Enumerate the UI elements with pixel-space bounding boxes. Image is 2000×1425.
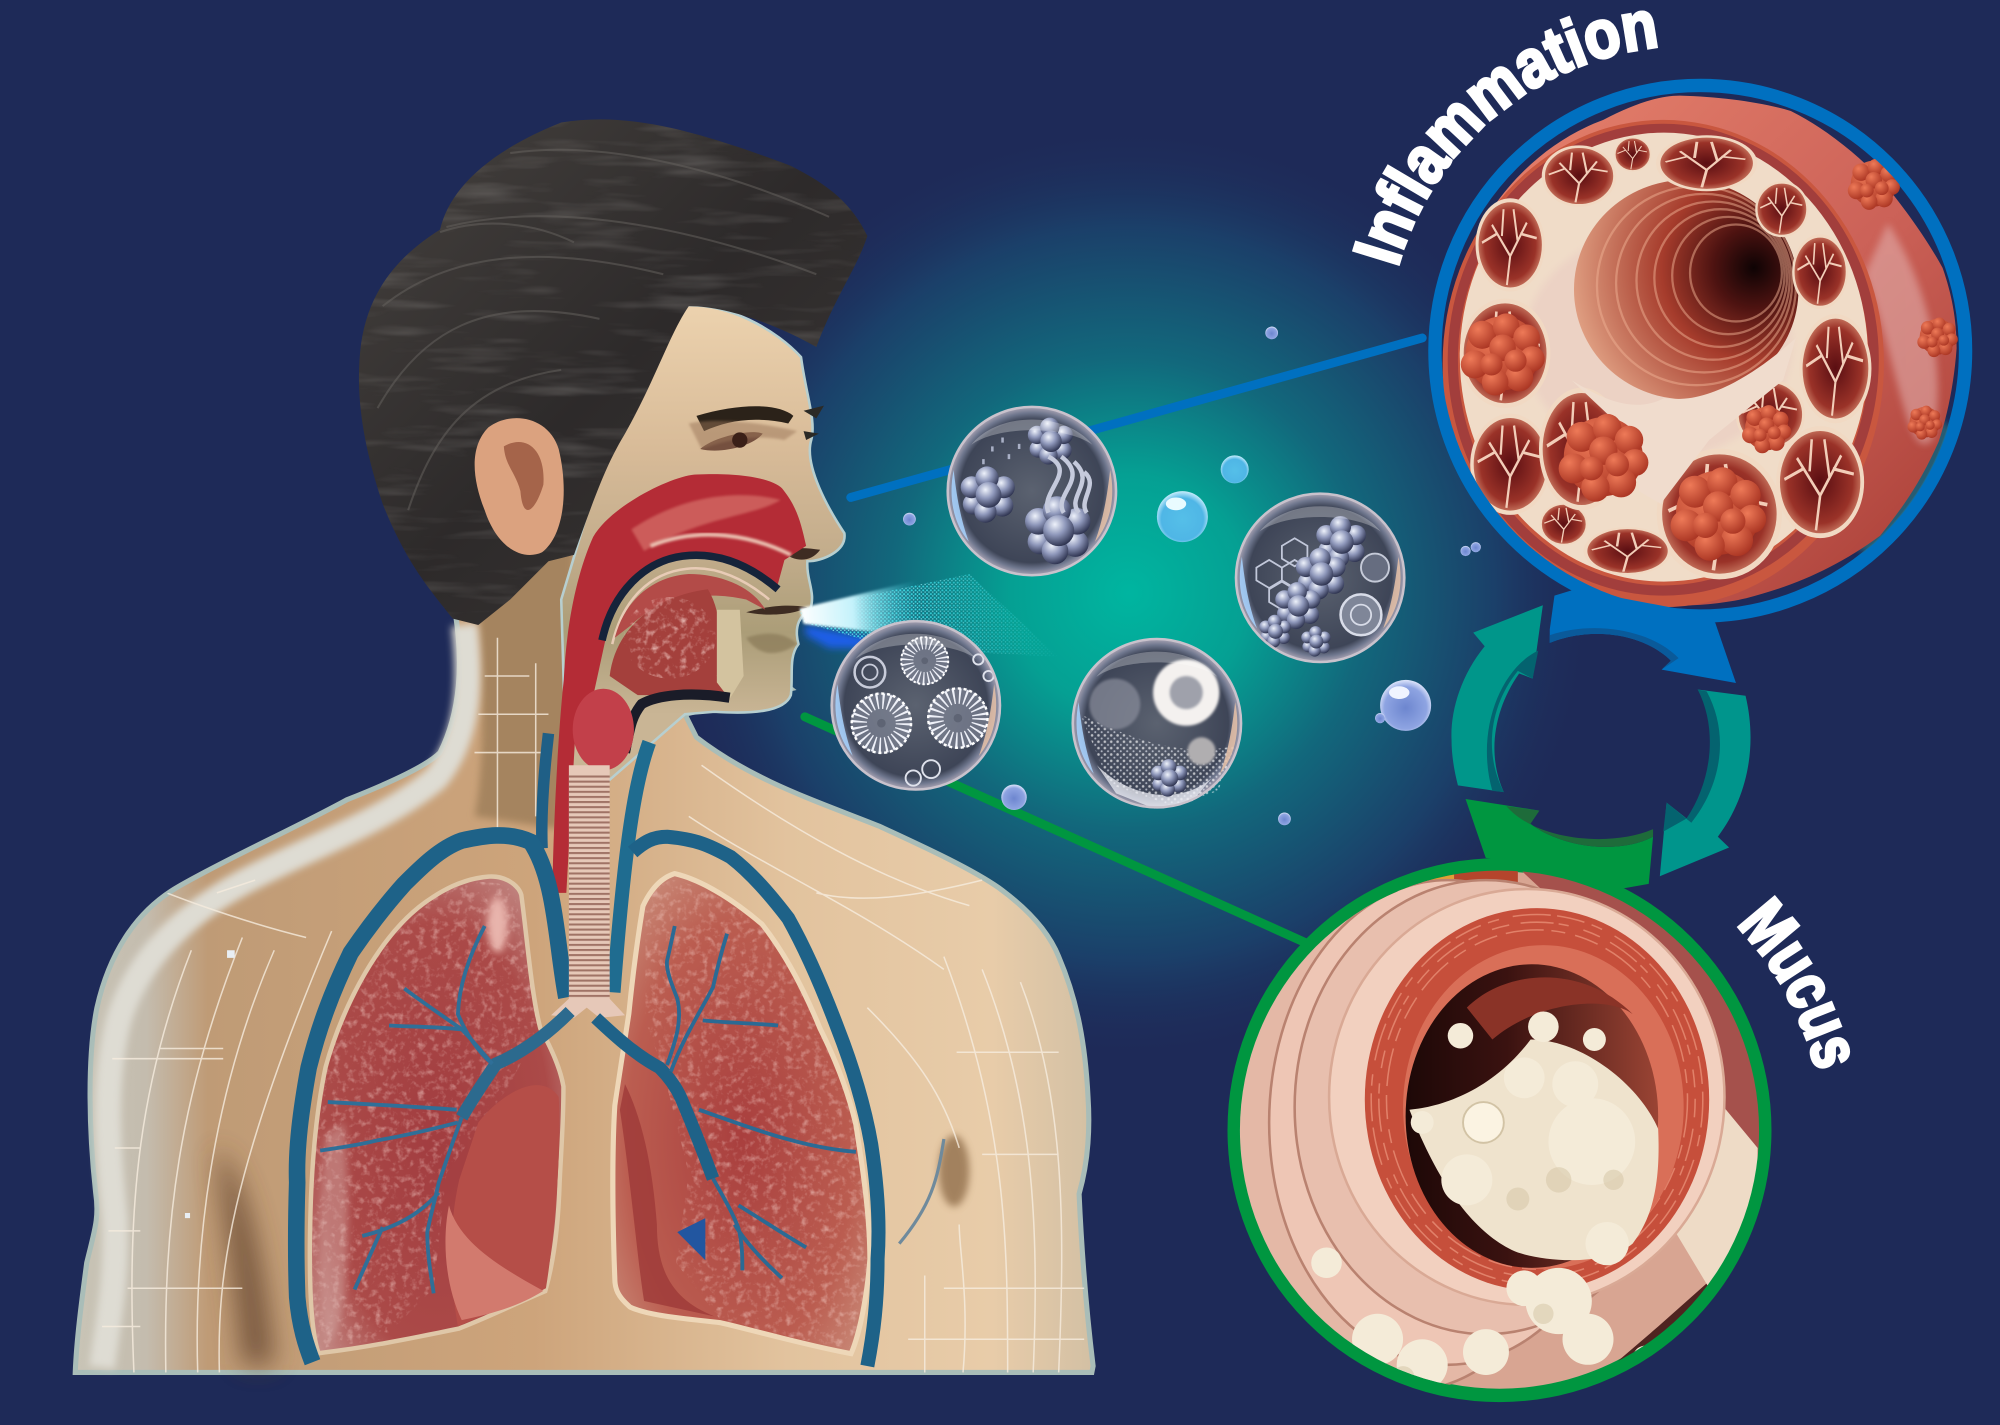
person anatomy figure	[75, 115, 1093, 1372]
right lung texture	[645, 880, 867, 1348]
nose and mouth detail	[746, 548, 820, 615]
lower lip shading	[746, 634, 797, 653]
inner pink wall	[1403, 945, 1684, 1269]
outer tube layers	[1240, 892, 1476, 1385]
lower left dark tissue	[1224, 1224, 1327, 1403]
left blue vessel	[542, 733, 548, 848]
air sacs	[1543, 147, 1615, 205]
bubbles	[903, 327, 1481, 825]
mucus airway panel	[1224, 865, 1773, 1403]
ring	[1234, 865, 1765, 1395]
small mucus bead	[1463, 1102, 1504, 1143]
cycle arrow: top blue	[1550, 589, 1736, 683]
lumen ribs	[1597, 186, 1796, 385]
palate pink	[615, 574, 765, 638]
bronchial tree right	[596, 1018, 713, 1179]
left pleura arch	[296, 835, 566, 1362]
left armpit shadow	[217, 1148, 274, 1365]
airway pale outline	[612, 568, 769, 644]
lumen	[1574, 180, 1798, 399]
left lung highlight	[487, 897, 508, 953]
lumen shading	[1467, 977, 1633, 1040]
hair texture	[359, 122, 851, 604]
red fibrous wall	[1365, 908, 1709, 1291]
bronchial tree left	[462, 1011, 570, 1117]
cream ring tissue	[1460, 133, 1868, 582]
mucosa bridge	[1571, 338, 1796, 504]
mucus shading	[1392, 1167, 1624, 1389]
connector line: blue to inflammation	[851, 338, 1422, 497]
hair strands	[378, 150, 829, 510]
tube body highlight	[1865, 223, 1938, 444]
red nasal cavity and pharynx	[552, 474, 806, 893]
body grid lines	[102, 638, 1084, 1372]
cut face outer	[1443, 120, 1884, 607]
torso and neck	[75, 510, 1093, 1372]
petri dish 4	[1073, 639, 1241, 809]
right lung dark pocket	[620, 1084, 714, 1316]
right armpit shadow	[939, 1135, 969, 1207]
mucus lumps	[1311, 1011, 1658, 1390]
face	[561, 305, 845, 816]
shadow behind tube	[1858, 419, 1950, 554]
left lower lobe	[451, 1085, 559, 1327]
mucosa shading	[1534, 256, 1789, 449]
connector line: green to mucus	[805, 717, 1314, 946]
right blue vessel	[614, 742, 649, 992]
petri dish 3	[832, 621, 1000, 790]
nasal tissue highlight	[631, 495, 781, 551]
tongue	[610, 589, 730, 695]
inflammation airway panel	[1435, 85, 1977, 616]
left lobe pink fold	[445, 1205, 543, 1320]
exhaled breath spray	[800, 574, 1059, 657]
jaw cream patch	[717, 610, 744, 699]
eye and brow	[689, 406, 824, 451]
mucus pool	[1409, 1040, 1659, 1260]
jaw dark band	[625, 695, 730, 753]
hair	[359, 119, 867, 625]
right armpit crease	[899, 1139, 944, 1244]
tongue texture	[624, 597, 716, 679]
tube body	[1446, 96, 1957, 606]
neck and shoulder rim band	[102, 625, 467, 1367]
shaded neck skin	[474, 510, 574, 829]
inflamed growths	[1461, 313, 1545, 395]
wall fibre strands	[1371, 915, 1703, 1284]
tissue backdrop right	[1518, 867, 1773, 1161]
airway dark outline	[602, 555, 778, 640]
bronchi branches right	[667, 926, 856, 1278]
bottom dark tissue	[1618, 1278, 1712, 1362]
small blue triangle vessel	[677, 1218, 705, 1260]
heading: Mucus: Mucus	[1736, 895, 1850, 1069]
right lung	[615, 876, 867, 1351]
cut face speckled band	[1453, 129, 1874, 591]
left lung pale edge	[319, 1122, 348, 1342]
top strip with orange detail	[1378, 870, 1518, 901]
small white marks	[185, 950, 235, 1218]
ring	[1435, 85, 1966, 616]
petri dish 2	[1236, 494, 1404, 662]
teal glow	[657, 121, 1601, 1065]
right pleura arch	[633, 837, 879, 1366]
bronchi branches left	[320, 926, 492, 1293]
trachea rings	[569, 773, 610, 1000]
cut face pale rim	[1329, 889, 1724, 1305]
larynx	[573, 689, 634, 770]
ear	[475, 418, 564, 555]
left lung texture	[312, 882, 538, 1348]
left lung	[312, 879, 561, 1351]
right cream tissue	[1676, 1109, 1758, 1286]
trachea	[551, 765, 625, 1018]
cycle arrow: left teal	[1451, 605, 1543, 792]
cycle arrow: right teal	[1660, 690, 1751, 876]
pale cavity fold	[651, 535, 791, 555]
cycle arrow: bottom green	[1466, 799, 1653, 889]
inner ear	[504, 442, 544, 510]
lumen dark	[1406, 964, 1658, 1268]
petri dish 1	[948, 407, 1116, 575]
